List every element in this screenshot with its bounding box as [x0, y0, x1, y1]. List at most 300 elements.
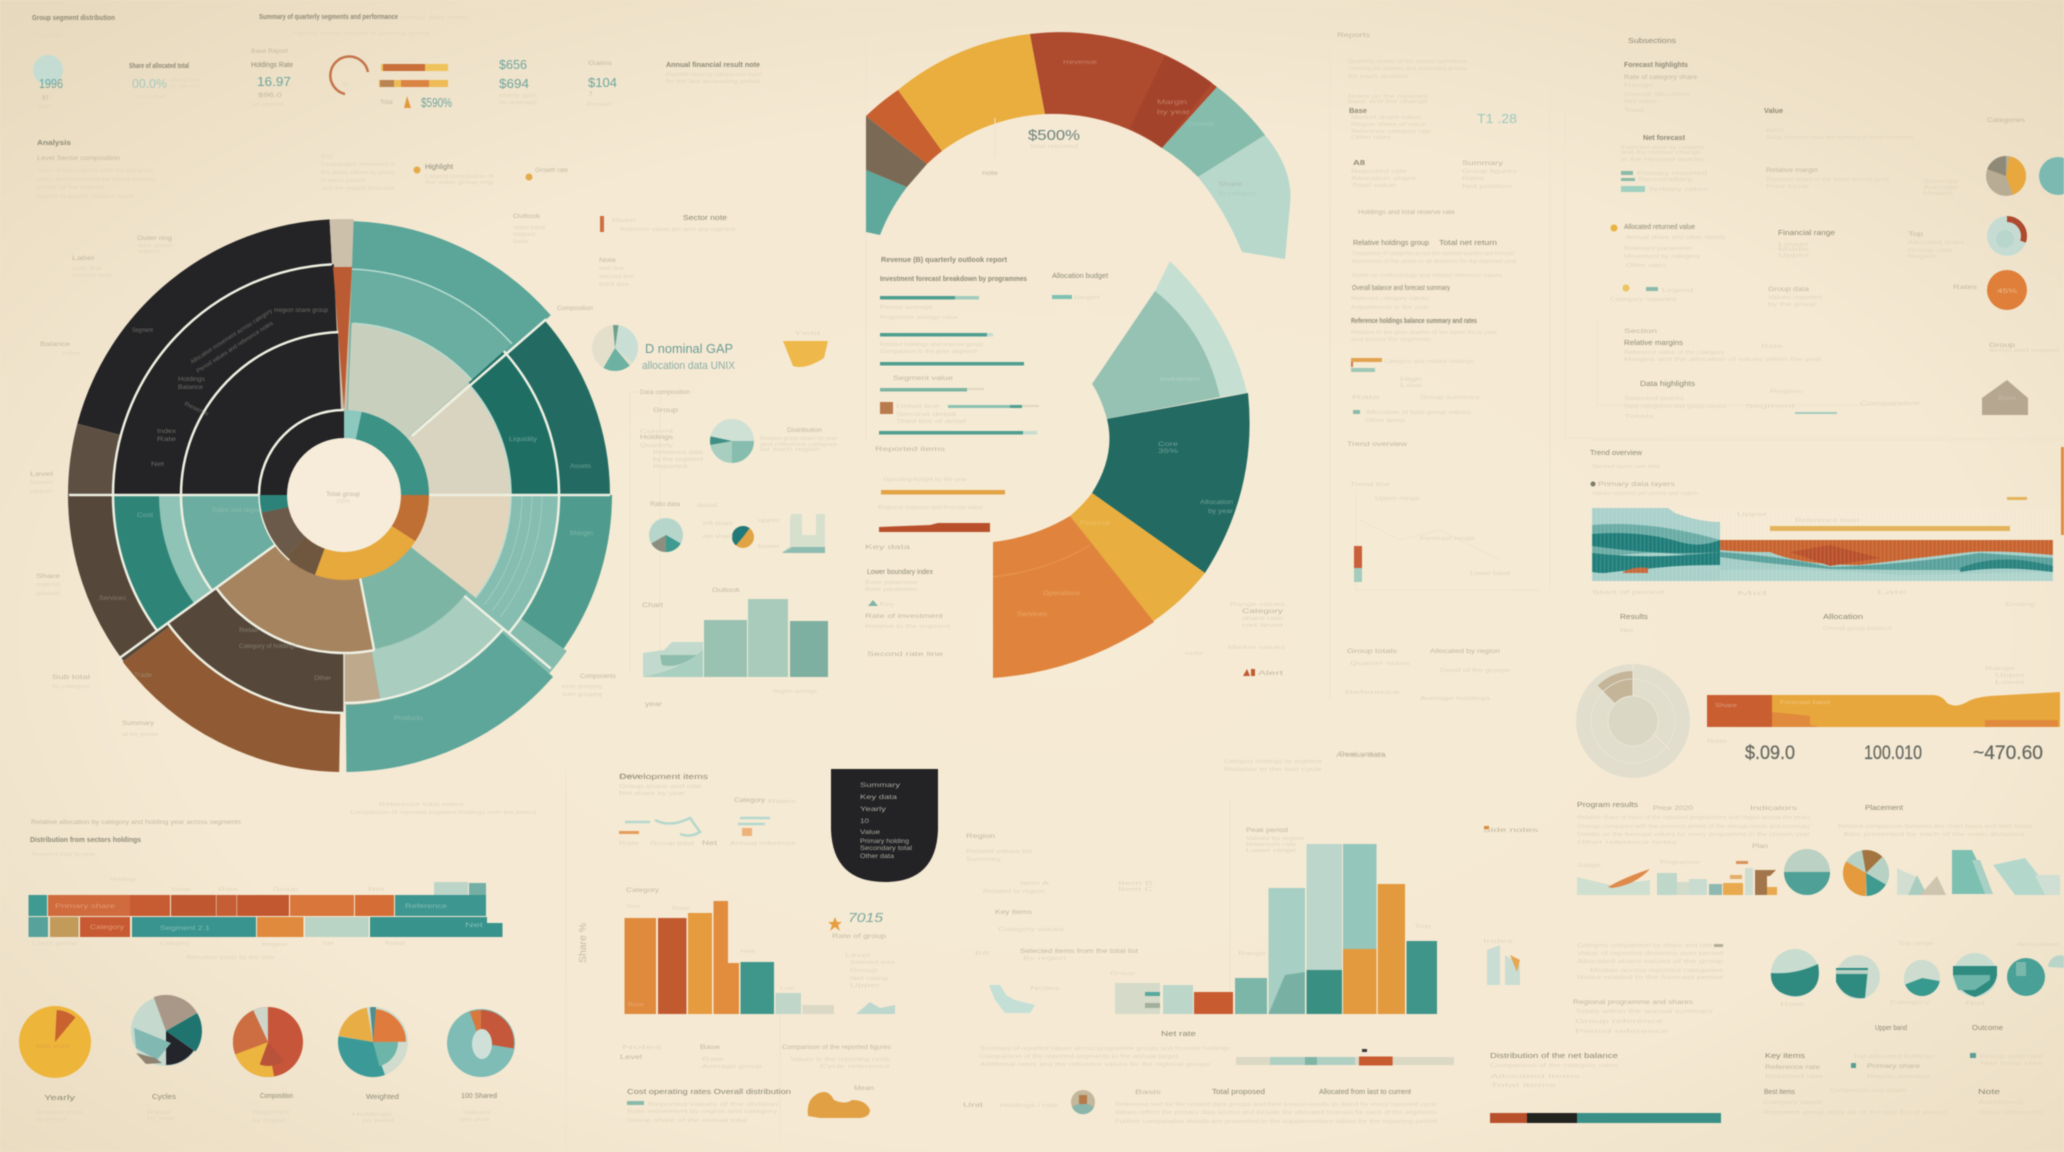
text sub-block: Rates — [1462, 176, 1484, 182]
notes columns: Top allocated holdings — [1853, 1054, 1935, 1060]
sunburst side annotations: second note — [72, 273, 112, 279]
small side chart near skyline: Side notes — [1483, 828, 1538, 834]
bar annotations: Net — [368, 887, 385, 893]
notes columns: Net total rate — [1980, 1061, 2043, 1067]
icon: pale vase — [782, 514, 825, 553]
strip under skyline: Additional notes and the reference values for the regional groups — [980, 1062, 1210, 1068]
dark teal fan segment — [1092, 393, 1250, 573]
notes below bars: Notes — [622, 1045, 663, 1051]
icon: yellow trapezoid — [783, 331, 828, 367]
notes columns: Group total rate — [1980, 1054, 2043, 1060]
callouts with yellow icons: Financial range — [1778, 228, 1835, 237]
text sub-block: Reference holdings balance summary and rates — [1351, 316, 1477, 325]
list text: Range values — [1230, 602, 1285, 608]
sunburst side annotations: dark group — [138, 243, 172, 249]
strip heading centre: Figures shown relative to previous period — [293, 31, 430, 37]
pie captions: by year — [147, 1116, 175, 1122]
mini area with orange leaf — [1577, 863, 1650, 895]
pie row captions: Annualised — [2017, 942, 2059, 948]
strip heading left: Group segment distribution — [32, 13, 115, 22]
notes right of bars: Level — [845, 953, 870, 959]
stat: twin values: yearly gain — [499, 93, 537, 99]
text blocks: in the reported quarter — [1621, 157, 1704, 163]
bar annotations — [32, 877, 484, 961]
bar series — [624, 901, 895, 1014]
icon callouts row — [414, 162, 736, 233]
stat: allocated total: in period — [170, 84, 200, 90]
strip heading centre: annual data notes — [400, 15, 468, 21]
stat: 590% with icon: $590% — [421, 95, 452, 110]
notes columns: Additional — [1978, 1100, 2023, 1106]
annotation right of pie: for each region — [760, 447, 820, 453]
callouts with yellow icons: Category reported — [1610, 297, 1676, 303]
icon: house tan — [1982, 380, 2028, 415]
icon callouts row: Highlight — [425, 162, 454, 171]
wave labels: Mid — [1737, 591, 1767, 597]
mini pies row — [649, 502, 780, 552]
stat: pale circle 1996: 97 — [42, 96, 49, 102]
stat: value pair: per segment — [252, 102, 284, 108]
text sub-block: Summary — [1462, 161, 1503, 167]
text list left: Period reference — [1575, 1029, 1668, 1035]
pie: yellow: Main share — [36, 1044, 70, 1050]
sunburst side annotations: Data — [620, 774, 641, 780]
intro text blocks: and the related forecasts — [321, 186, 395, 192]
chart: large sunburst — [21, 172, 667, 818]
mini mixed bars: Plan — [1752, 844, 1768, 850]
mini legend bars — [1351, 358, 1480, 424]
mini bar chart: Region average — [773, 689, 817, 695]
callouts with yellow icons: Upper — [1778, 253, 1809, 259]
notes below bars: Level — [620, 1055, 642, 1061]
skyline annotations: Notes — [1030, 986, 1061, 992]
pie captions: Cycles — [152, 1092, 176, 1101]
big values — [1707, 739, 2043, 764]
sub-panel text: Quarterly — [640, 443, 673, 449]
labels on sunburst segments: Net — [151, 462, 164, 468]
stat: twin values — [499, 57, 537, 106]
panel: layered wave chart — [1590, 447, 2064, 686]
skyline annotations: Maximum rate — [1246, 842, 1296, 848]
list headings: Investment forecast breakdown by programmes — [880, 274, 1027, 283]
text list left: Totals within the annual summary — [1575, 1009, 1713, 1015]
lower text: Average holdings — [1420, 696, 1490, 702]
pie row captions: Upper band — [1875, 1023, 1907, 1032]
notes columns: Note — [1978, 1087, 2000, 1096]
list text: Period average — [880, 305, 933, 311]
sunburst side annotations: regional — [36, 582, 60, 588]
column heading and paragraphs: Notes on the reported — [1348, 94, 1428, 100]
mini legend bars: High — [1400, 377, 1422, 383]
big values: 100.010 — [1864, 743, 1922, 764]
notes below bars: Comparison of the reported figures — [782, 1045, 891, 1051]
sunburst side annotations: Components — [580, 674, 616, 680]
list text: Third line of detail — [896, 419, 966, 425]
arc labels: by year — [1157, 110, 1190, 116]
strip text: Also presented for each of the main divisions — [1843, 832, 2025, 838]
pie: orange brown — [1843, 850, 1889, 896]
stat: 104: Period — [587, 102, 611, 108]
text list left: Notes related to the forecast period — [1577, 975, 1723, 981]
pie captions: per period — [362, 1118, 394, 1124]
panel heading: Reported total by year — [32, 852, 95, 858]
mini mixed bars — [1709, 844, 1777, 895]
labels on sunburst segments: Retail — [239, 628, 258, 634]
small photo circle and footnotes: Basis — [1135, 1090, 1161, 1096]
text list left: Median across reported categories — [1590, 968, 1723, 974]
mini legend bars: Rate — [1352, 395, 1380, 401]
fan thin arc and labels: 35% — [1158, 449, 1179, 455]
panel: black shield callout: Primary holding — [860, 839, 909, 845]
notes columns: Reference rate — [1765, 1065, 1821, 1071]
stat: twin values: $694 — [499, 76, 529, 91]
panel: lower notes with orange hump: Group share of the annual total — [627, 1118, 747, 1124]
callouts with yellow icons: Values reported — [1768, 295, 1822, 301]
pie captions: by period — [36, 1117, 66, 1123]
skyline annotations: Selected items from the total list — [1020, 949, 1138, 955]
mini bar chart: year — [645, 702, 662, 708]
skyline annotations: Category holdings by segment — [1224, 759, 1323, 765]
strip heading centre: Summary of quarterly segments and performance — [259, 12, 398, 21]
list text: Comparison to the prior segment — [880, 349, 978, 355]
small photo circle and footnotes: Total proposed — [1212, 1087, 1265, 1096]
callouts with yellow icons: Middle — [1778, 247, 1809, 253]
wave chart title: Trend overview — [1590, 448, 1643, 457]
panel heading: Comparison of reported segment holdings over the period — [350, 810, 536, 816]
skyline annotations: Net rate — [1161, 1029, 1196, 1038]
mini pies row: lower — [758, 544, 780, 550]
text block with mini map: Annual reference — [730, 841, 796, 847]
top stat strip — [32, 12, 762, 110]
sub-panel text: Reference data — [653, 450, 704, 456]
notes columns: Primary share — [1867, 1064, 1921, 1070]
intro text blocks: Quarter to quarter variation noted — [36, 194, 134, 200]
pie: teal half — [1784, 849, 1830, 895]
intro text blocks: Analysis — [37, 138, 71, 147]
text sub-block: Relative to the prior quarter of the same fiscal year — [1351, 330, 1497, 336]
panel: lower notes with orange hump: Rate movement by region and category — [627, 1109, 777, 1115]
list text: Base parameter — [865, 580, 918, 586]
icon callouts row: Reference values per area and segment — [620, 227, 736, 233]
inner ring segments — [224, 375, 464, 615]
panel: revenue progress list — [865, 255, 1285, 677]
list text: Key data — [865, 545, 911, 551]
text sub-block: Relevant category values — [1351, 296, 1429, 302]
list text: Second detail — [896, 412, 956, 418]
mini bar chart: Outlook — [712, 588, 741, 594]
red arc segment — [1030, 32, 1217, 148]
text blocks: Tertiary rates — [1648, 187, 1708, 193]
progress bars — [879, 296, 1039, 532]
teal fan segment — [1092, 291, 1220, 419]
pie: orange: 45% — [1997, 289, 2018, 295]
sunburst side annotations: values — [138, 249, 160, 255]
centre hole with label — [287, 438, 401, 552]
list text: Related holdings and reserve group — [880, 342, 983, 348]
fan thin arc and labels: Investment — [1160, 377, 1200, 383]
chart: beige concentric pie — [1576, 664, 1690, 778]
pie captions: by region — [252, 1118, 286, 1124]
text blocks: Net forecast — [1643, 133, 1685, 142]
lower block: Selected points — [1624, 396, 1684, 402]
lower text: Group totals — [1347, 649, 1397, 655]
arc centre value — [982, 118, 1080, 177]
skyline annotations: Top — [1414, 924, 1431, 930]
lower block: Section — [1624, 329, 1657, 335]
arc labels: Growth — [1188, 122, 1214, 128]
panel: mini chart strip — [1577, 800, 2060, 896]
notes columns: Other references — [1978, 1110, 2043, 1116]
arc labels: Share — [1218, 182, 1243, 188]
pie captions: Weighted — [366, 1092, 399, 1101]
text blocks: Summary — [1923, 179, 1958, 185]
icon: yellow trapezoid: Yield — [794, 331, 820, 337]
pie captions: Rates — [147, 1110, 171, 1116]
allocation headline — [642, 341, 736, 372]
sub headings: Range — [1985, 666, 2015, 672]
star value — [828, 910, 887, 940]
wave chart title: Primary data layers — [1598, 482, 1675, 488]
text list left: Allocated share values of the group — [1577, 959, 1723, 965]
lower block: Items and related — [1989, 348, 2059, 354]
sunburst side annotations: upper band — [513, 225, 545, 231]
panel: bottom right notes — [1490, 1051, 2043, 1123]
lower block: Totals — [1624, 414, 1655, 420]
text list left — [1573, 943, 1723, 1035]
intro text blocks: Key — [321, 154, 333, 160]
lower block — [1597, 320, 2059, 420]
stat: pale circle 1996: Index — [38, 104, 52, 110]
mini pies row: net share — [703, 534, 733, 540]
pale right arc segment — [1198, 135, 1290, 259]
text blocks: Reported share in the latest annual cycle — [1766, 177, 1889, 183]
fan thin arc and labels: Services — [1017, 612, 1047, 618]
stat: twin values: $656 — [499, 57, 527, 72]
big values: ~470.60 — [1973, 743, 2043, 764]
labels on sunburst segments — [99, 308, 593, 722]
pie: red yellow — [233, 1007, 303, 1077]
small vertical chart — [1347, 442, 1540, 590]
stat: value pair: $96.0 — [258, 93, 283, 99]
bar chart text: Low — [780, 986, 794, 992]
icon: mini pie — [592, 325, 638, 371]
bar chart text: Net — [740, 949, 756, 955]
panel: black shield callout: Value — [860, 830, 881, 836]
bar annotations: Reference — [405, 904, 448, 910]
mini legend bars: Low — [1400, 383, 1422, 389]
text sub-block: Total net return — [1439, 238, 1497, 247]
lower text: Quarter notes — [1350, 661, 1410, 667]
callouts with yellow icons: Group data — [1768, 287, 1810, 293]
strip heading left — [32, 13, 115, 39]
text sub-block: A8 — [1353, 158, 1365, 167]
labels on sunburst segments: Holdings — [178, 377, 205, 383]
pie captions: Reported — [252, 1110, 289, 1116]
wave chart title: Values reported per period and region — [1592, 491, 1698, 497]
bar annotations: Total — [384, 941, 405, 947]
arc labels: Margin — [1157, 100, 1187, 106]
bar annotations: Rate — [218, 887, 238, 893]
callouts with yellow icons: Relevant parameter — [1624, 246, 1693, 252]
list text: Relative to the segment — [865, 624, 951, 630]
text sub-block: Overall balance and forecast summary — [1352, 283, 1450, 292]
bar chart text — [626, 888, 794, 1008]
skyline annotations: Values by region — [1246, 836, 1304, 842]
chart: long orange band — [1707, 692, 2060, 727]
small photo circle and footnotes: Further comparative details are presented in the supplementary tables for the reporting period — [1115, 1119, 1437, 1125]
text blocks: Median — [1923, 191, 1953, 197]
mini legend bars: Group summary — [1420, 395, 1480, 401]
skyline annotations: Region — [966, 834, 995, 840]
annotation right of pie — [760, 428, 837, 453]
partial pale pie — [2048, 955, 2064, 968]
stacked bar row one — [28, 882, 486, 916]
skyline annotations: Item A — [1020, 881, 1050, 887]
small side chart near skyline — [1483, 826, 1538, 985]
ring separators — [21, 172, 667, 818]
legend text: Allocated items — [1490, 1074, 1581, 1080]
panel: lower notes with orange hump — [627, 1086, 874, 1124]
intro text blocks: Share of each segment within the total group — [38, 168, 153, 174]
bar chart text: Category — [626, 888, 659, 894]
pie: pale teal partial — [2039, 157, 2064, 195]
strip text: Indicators — [1750, 806, 1797, 812]
labels on sunburst segments: Services — [99, 596, 126, 602]
note block: for the last accounting period — [666, 79, 760, 85]
column heading and paragraphs: Reference category rate — [1351, 129, 1431, 135]
notes below bars: Values in the reporting cycle — [790, 1057, 890, 1063]
big values: Rate — [1707, 739, 1727, 745]
labels on sunburst segments: Segment — [132, 328, 153, 334]
panel: lower notes with orange hump: Reported values of the division — [648, 1102, 778, 1108]
stat: allocated total: net value — [136, 94, 166, 100]
notes below bars — [620, 1045, 891, 1070]
icon: orange hump — [808, 1092, 870, 1118]
text sub-block: Relative holdings group — [1353, 238, 1429, 247]
stat: pale circle 1996 — [33, 55, 63, 110]
text sub-block: Holdings and total reserve rate — [1358, 210, 1456, 216]
notes right of bars: Selected area — [850, 960, 896, 966]
yellow fan segment — [1070, 493, 1205, 622]
teal pie one — [1771, 949, 1819, 997]
notes columns: Best items — [1764, 1087, 1795, 1096]
list text: Alert — [1258, 671, 1284, 677]
arc centre value: $500% — [1028, 127, 1080, 144]
callouts with yellow icons: by the group — [1768, 302, 1816, 308]
labels on sunburst segments: Reserve — [183, 401, 210, 418]
mini pale bars — [1657, 860, 1707, 895]
strip text: Other reference notes — [1577, 840, 1677, 846]
arc labels: Revenue — [1063, 60, 1098, 66]
sunburst side annotations: third line — [599, 282, 629, 288]
list text: Detail line — [896, 404, 940, 410]
text blocks: Primary reported — [1637, 171, 1707, 177]
skyline annotations: Item C — [1118, 887, 1153, 893]
list headings: target — [1074, 295, 1101, 301]
list text: Key — [880, 602, 894, 608]
list headings: Allocation budget — [1052, 271, 1109, 280]
pie row captions: Category — [1890, 1000, 1930, 1006]
panel: text column four with pies — [1597, 36, 2064, 420]
notes right of bars: Net rating — [850, 976, 888, 982]
skyline annotations: Item B — [1118, 881, 1154, 887]
chart: long orange band: Forecast band — [1780, 700, 1830, 706]
sunburst side annotations: all the groups — [122, 732, 158, 738]
panel heading — [30, 802, 536, 858]
sunburst side annotations: Sub total — [52, 675, 90, 681]
sunburst side annotations: Label — [72, 256, 94, 262]
stat: allocated total — [129, 61, 200, 100]
intro text blocks: in each period — [321, 178, 365, 184]
text blocks: Overall allocation — [1624, 92, 1690, 98]
column heading and paragraphs: Market share value — [1351, 115, 1421, 121]
stat: 104: Gains — [588, 61, 612, 67]
stat: value pair: Base Report — [251, 49, 288, 55]
lower block: Comparative — [1860, 401, 1920, 407]
strip text: Details on the forecast values for every programme in the chosen year — [1577, 832, 1810, 838]
teal pie four — [1953, 953, 1997, 997]
sunburst side annotations: Outer ring — [137, 236, 172, 242]
bar annotations: Holdings — [110, 877, 137, 883]
text list left: Regional programme and shares — [1573, 1000, 1693, 1006]
strip text: Relative share of each of the reported programmes and region across the years — [1577, 815, 1810, 821]
skyline annotations: Bill — [975, 951, 989, 957]
skyline annotations: Group — [1110, 971, 1135, 977]
legend text: Total items — [1490, 1083, 1557, 1089]
notes columns: Reported group data as of the last fiscal period — [1763, 1110, 1947, 1116]
text blocks: and the relative change — [1621, 150, 1701, 156]
panel: black shield callout: Secondary total — [860, 846, 912, 852]
callouts with yellow icons — [1610, 222, 1977, 308]
text list left: Category comparison by share and rate — [1577, 943, 1713, 949]
icon callouts row: Marker — [612, 218, 636, 224]
list text: Segment value — [893, 376, 954, 382]
text blocks: Value — [1764, 106, 1783, 115]
strip text — [1577, 800, 2032, 846]
sunburst side annotations: one line — [599, 266, 624, 272]
stat: allocated total: 00.0% — [132, 76, 167, 91]
chart: long orange band: Share — [1715, 703, 1737, 709]
labels on sunburst segments: Balance — [178, 385, 204, 391]
text block with mini map: Rate — [619, 841, 639, 847]
mini pies row: detail — [697, 503, 717, 509]
icon: gauge arc — [330, 56, 368, 94]
list text: Category — [1242, 609, 1283, 615]
text sub-block: Group figures — [1462, 169, 1517, 175]
sunburst side annotations: notes — [62, 351, 80, 357]
mini bar chart: Chart — [642, 603, 663, 609]
text sub-block: Comparison of categories across the reported quarters and forecast — [1352, 251, 1514, 257]
star value: 7015 — [848, 910, 884, 925]
pie captions: Regional share — [36, 1110, 83, 1116]
allocation headline: D nominal GAP — [645, 341, 733, 356]
text blocks: Net value — [1624, 99, 1657, 105]
wave labels: Start of period — [1592, 590, 1664, 596]
list text: Programme average value — [880, 315, 958, 321]
mini pies row: Ratio data — [650, 502, 681, 508]
fan thin arc and labels: by year — [1208, 509, 1233, 515]
notes below bars: Cycle reference — [820, 1064, 890, 1070]
callouts with yellow icons: Legend — [1662, 288, 1693, 294]
notes below bars: Rate — [702, 1057, 724, 1063]
bar annotations: Lower period — [32, 941, 77, 947]
skyline annotations: Range — [1238, 951, 1266, 957]
labels on sunburst segments: Index — [157, 429, 176, 435]
skyline annotations: Peak values — [1339, 752, 1385, 758]
panel: allocation summary — [592, 325, 837, 708]
small photo circle and footnotes: Holdings / rate — [1000, 1103, 1058, 1109]
list text: note — [1185, 651, 1203, 657]
